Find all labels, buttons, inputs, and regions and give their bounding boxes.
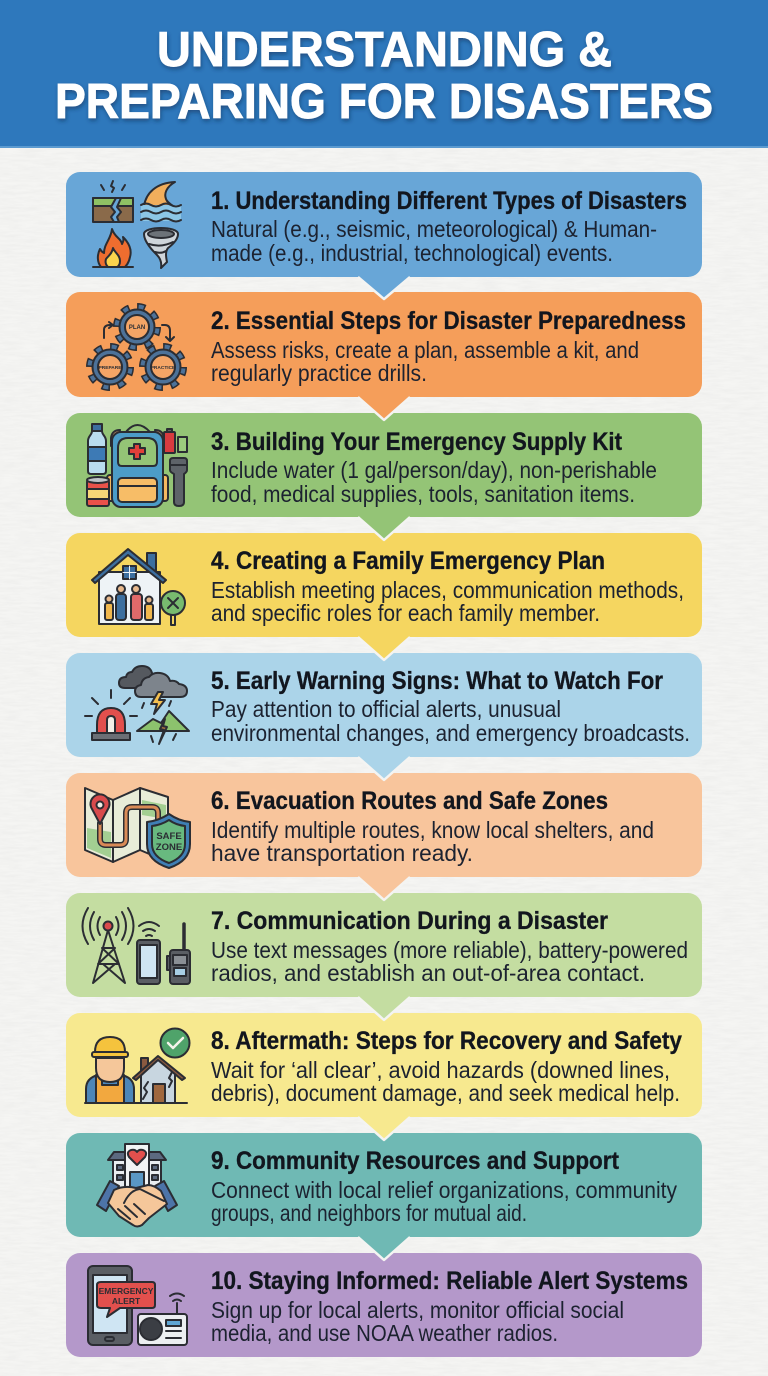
description [211, 457, 657, 507]
description [211, 1297, 624, 1346]
description: Natural (e.g., seismic, meteorological) & Human- [211, 216, 657, 242]
title: UNDERSTANDING & [157, 23, 612, 77]
heading: 6. Evacuation Routes and Safe Zones [211, 787, 608, 815]
description [211, 337, 639, 386]
icon: house with family [92, 549, 185, 625]
panel 8: aftermath [66, 1013, 702, 1117]
icon: earthquake, wave, fire, tornado [93, 181, 181, 268]
description: have transportation ready. [211, 840, 473, 866]
heading: 2. Essential Steps for Disaster Preparedness [211, 307, 686, 335]
description: debris), document damage, and seek medical help. [211, 1080, 680, 1106]
arrow: panel 6 to 7 [358, 876, 410, 900]
description: Connect with local relief organizations, community [211, 1177, 677, 1203]
description [211, 1177, 677, 1226]
description: and specific roles for each family member. [211, 600, 600, 626]
description: regularly practice drills. [211, 360, 427, 386]
icon: phone alert and radio: ALERT [112, 1296, 141, 1306]
description: Use text messages (more reliable), battery-powered [211, 937, 688, 963]
description: environmental changes, and emergency broadcasts. [211, 720, 690, 746]
panel 7: communication [66, 893, 702, 997]
description: Wait for ‘all clear’, avoid hazards (downed lines, [211, 1057, 670, 1083]
icon: tower, phone, radio [82, 908, 190, 984]
description [211, 1057, 680, 1106]
title: PREPARING FOR DISASTERS [55, 75, 713, 129]
icon: map and safe zone shield: ZONE [156, 842, 182, 853]
icon: map and safe zone shield [85, 788, 190, 868]
description [211, 696, 690, 746]
heading: 8. Aftermath: Steps for Recovery and Safety [211, 1027, 682, 1055]
description: radios, and establish an out-of-area contact. [211, 960, 645, 986]
icon: three gears [90, 307, 183, 387]
panel 6: evacuation routes [66, 773, 702, 877]
heading: 10. Staying Informed: Reliable Alert Systems [211, 1267, 688, 1295]
description [211, 937, 688, 986]
icon: building and handshake [97, 1144, 177, 1226]
heading: 9. Community Resources and Support [211, 1147, 620, 1175]
icon: phone alert and radio: EMERGENCY [99, 1286, 154, 1296]
heading: 7. Communication During a Disaster [211, 907, 608, 935]
arrow: panel 8 to 9 [358, 1116, 410, 1140]
icon: backpack and supplies [87, 424, 187, 507]
icon: worker, damaged house, check [85, 1028, 190, 1103]
description [211, 817, 654, 866]
description: Include water (1 gal/person/day), non-perishable [211, 457, 657, 483]
arrow: panel 4 to 5 [358, 636, 410, 660]
description [211, 216, 657, 266]
arrow: panel 2 to 3 [358, 396, 410, 420]
heading: 3. Building Your Emergency Supply Kit [211, 428, 623, 456]
icon: phone alert and radio [88, 1266, 187, 1345]
icon: map and safe zone shield: SAFE [156, 831, 182, 842]
description: Identify multiple routes, know local shelters, and [211, 817, 654, 843]
description: made (e.g., industrial, technological) events. [211, 240, 613, 266]
panel 1: types of disasters [66, 172, 702, 277]
arrow: panel 5 to 6 [358, 756, 410, 780]
heading: 4. Creating a Family Emergency Plan [211, 547, 605, 575]
icon: three gears: PREPARE [99, 365, 122, 371]
arrow: panel 1 to 2 [358, 276, 410, 299]
panel 3: supply kit [66, 413, 702, 517]
description: media, and use NOAA weather radios. [211, 1320, 558, 1346]
icon: three gears: PLAN [129, 325, 145, 331]
arrow: panel 9 to 10 [358, 1236, 410, 1260]
description: Assess risks, create a plan, assemble a kit, and [211, 337, 639, 363]
description: groups, and neighbors for mutual aid. [211, 1200, 527, 1226]
heading: 1. Understanding Different Types of Disasters [211, 187, 687, 215]
panel 10: staying informed [66, 1253, 702, 1357]
icon: three gears: PRACTICE [151, 365, 176, 371]
description: food, medical supplies, tools, sanitation items. [211, 481, 635, 507]
header banner [0, 0, 768, 148]
arrow: panel 3 to 4 [358, 516, 410, 540]
panel 9: community [66, 1133, 702, 1237]
heading: 5. Early Warning Signs: What to Watch For [211, 667, 663, 695]
icon: siren, storm clouds, ground crack [85, 666, 189, 744]
description: Establish meeting places, communication methods, [211, 577, 684, 603]
title [55, 23, 713, 129]
description [211, 577, 684, 626]
description: Pay attention to official alerts, unusual [211, 696, 561, 722]
panel 2: preparedness steps [66, 292, 702, 397]
arrow: panel 7 to 8 [358, 996, 410, 1020]
panel 4: family plan [66, 533, 702, 637]
description: Sign up for local alerts, monitor official social [211, 1297, 624, 1323]
panel 5: warning signs [66, 653, 702, 757]
